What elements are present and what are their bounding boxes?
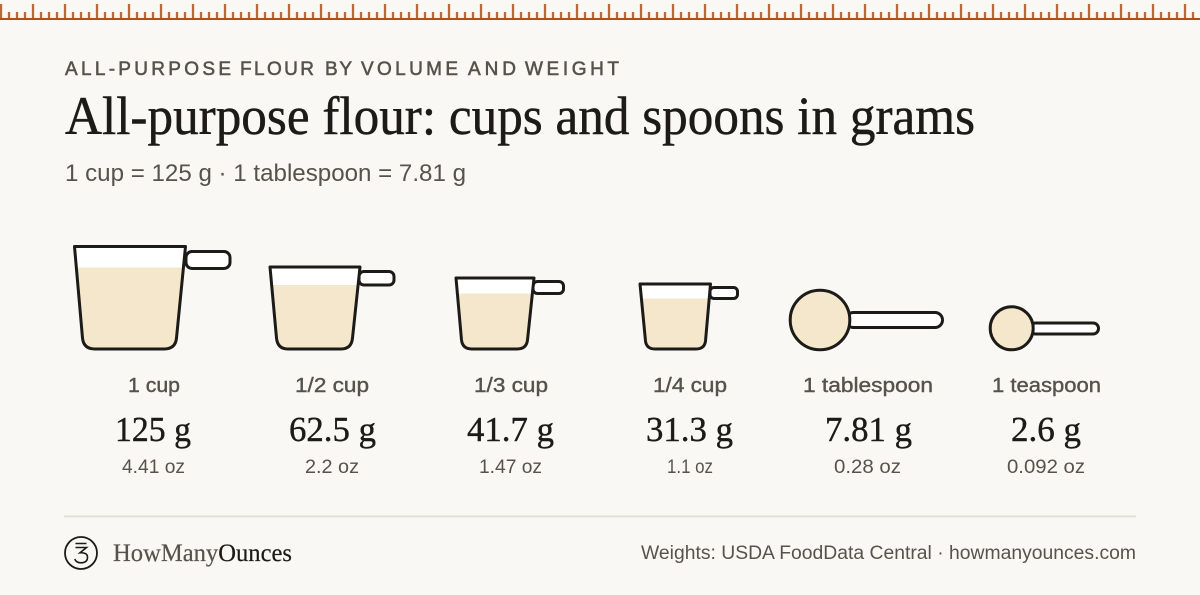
source note: Weights: USDA FoodData Central · howmanyounces.com: [641, 543, 1136, 564]
eyebrow: VOLUME: [361, 59, 458, 80]
eyebrow: ALL-PURPOSE: [65, 59, 231, 80]
grams: 125 g: [115, 410, 191, 449]
eyebrow: AND: [468, 59, 516, 80]
ounces: 4.41 oz: [122, 457, 185, 478]
label: 1 teaspoon: [992, 375, 1101, 397]
label: 1/3 cup: [474, 375, 548, 397]
grams: 62.5 g: [289, 410, 376, 449]
icon: 1 cup measure: [74, 246, 230, 349]
logo: [65, 537, 292, 569]
item: 1/2 cup: [270, 267, 394, 478]
title: All-purpose flour: cups and spoons in grams: [65, 86, 975, 146]
ruler border: [0, 4, 1200, 20]
item: 1 cup: [74, 246, 230, 478]
eyebrow: WEIGHT: [525, 59, 619, 80]
item: 1 teaspoon: [990, 307, 1101, 478]
icon: third cup measure: [456, 278, 564, 349]
grams: 7.81 g: [825, 410, 912, 449]
label: 1/2 cup: [295, 375, 369, 397]
label: 1/4 cup: [653, 375, 727, 397]
icon: quarter cup measure: [640, 284, 738, 349]
ounces: 2.2 oz: [305, 457, 359, 478]
eyebrow: BY: [325, 59, 352, 80]
ounces: 1.47 oz: [479, 457, 542, 478]
ounces: 0.28 oz: [834, 457, 901, 478]
item: 1/3 cup: [456, 278, 564, 478]
grams: 41.7 g: [467, 410, 554, 449]
subtitle: 1 cup = 125 g · 1 tablespoon = 7.81 g: [65, 160, 466, 187]
eyebrow: [65, 59, 619, 80]
icon: tablespoon: [790, 290, 942, 350]
icon: ounce mark: [65, 537, 97, 569]
ounces: 1.1 oz: [667, 457, 713, 478]
icon: teaspoon: [990, 307, 1098, 350]
grams: 31.3 g: [646, 410, 733, 449]
item: 1/4 cup: [640, 284, 738, 478]
brand name: HowManyOunces: [113, 540, 292, 567]
icon: half cup measure: [270, 267, 394, 349]
ounces: 0.092 oz: [1007, 457, 1085, 478]
eyebrow: FLOUR: [240, 59, 314, 80]
label: 1 cup: [128, 375, 180, 397]
grams: 2.6 g: [1011, 410, 1081, 449]
label: 1 tablespoon: [803, 375, 933, 397]
item: 1 tablespoon: [790, 290, 942, 478]
